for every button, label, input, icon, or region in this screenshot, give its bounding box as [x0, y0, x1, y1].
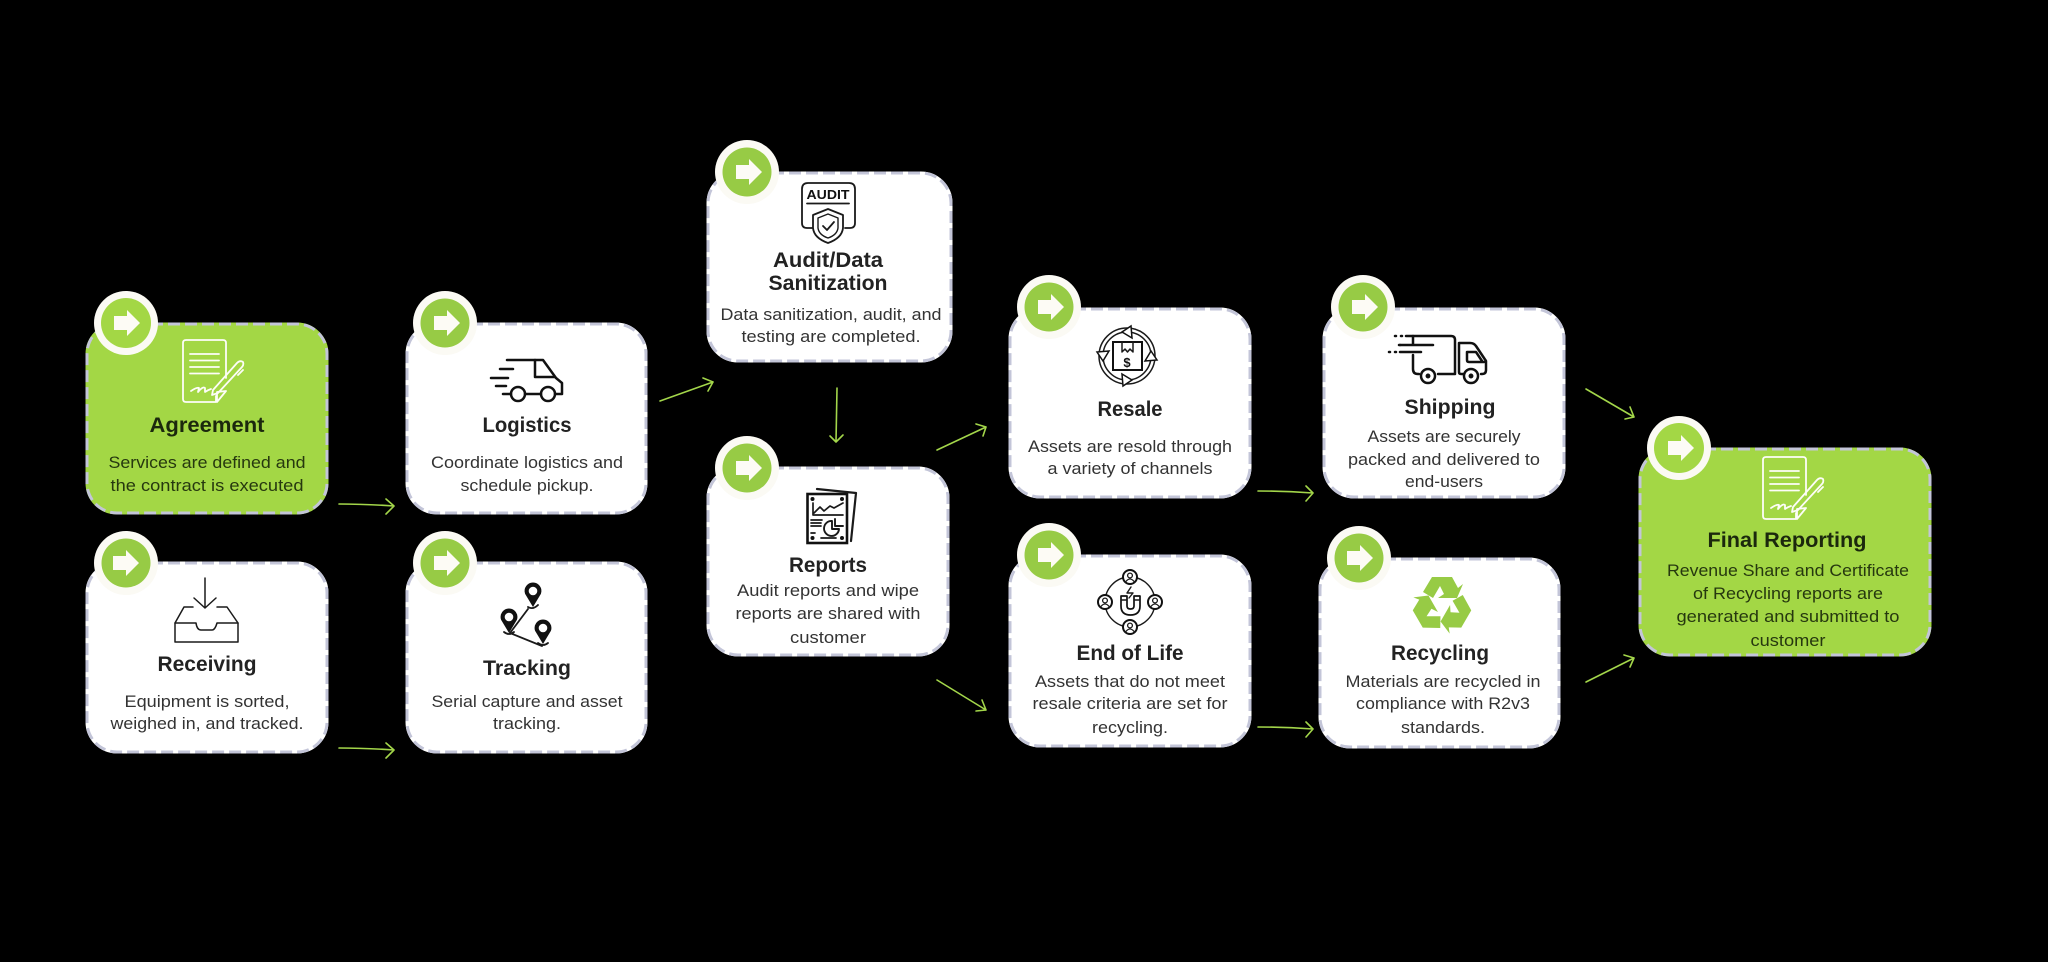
panel: Logistics [407, 291, 646, 513]
arrow: Agreement to Logistics [339, 499, 394, 514]
description: Revenue Share and Certificate [1667, 561, 1909, 580]
description: end-users [1405, 472, 1483, 491]
arrow: Resale to Shipping [1258, 486, 1313, 501]
heading: End of Life [1076, 642, 1184, 665]
heading: Recycling [1391, 642, 1489, 665]
description: reports are shared with [736, 604, 920, 623]
icon: signed document [183, 340, 243, 402]
description: packed and delivered to [1348, 450, 1540, 469]
description: recycling. [1092, 718, 1168, 737]
description: Serial capture and asset [432, 692, 623, 711]
heading: Shipping [1404, 396, 1496, 419]
description: Data sanitization, audit, and [720, 305, 942, 324]
description [720, 305, 942, 346]
badge: arrow [1331, 275, 1395, 339]
icon: audit shield: AUDIT [806, 187, 850, 202]
description [1667, 561, 1909, 650]
panel: Recycling [1320, 526, 1559, 747]
description: testing are completed. [742, 327, 920, 346]
arrow: Audit to Reports [830, 388, 843, 442]
description [109, 692, 304, 733]
heading [768, 249, 888, 295]
heading: Final Reporting [1708, 529, 1866, 552]
panel: Resale [1010, 275, 1250, 497]
description [108, 453, 306, 495]
description: of Recycling reports are [1693, 584, 1883, 603]
icon: inbox tray [175, 578, 238, 642]
description: Services are defined and [108, 453, 306, 472]
description [1346, 672, 1540, 737]
arrow: Logistics to Audit [660, 378, 713, 401]
panel: Receiving [87, 531, 327, 752]
icon: circular resale box [1097, 326, 1157, 386]
description: customer [1750, 631, 1826, 650]
badge: arrow [413, 531, 477, 595]
icon: recycling symbol [1407, 577, 1476, 637]
arrow: End of Life to Recycling [1258, 722, 1313, 737]
badge: arrow [1017, 523, 1081, 587]
badge: arrow [94, 531, 158, 595]
badge: arrow [715, 140, 779, 204]
heading: Receiving [158, 653, 256, 676]
heading: Reports [789, 554, 867, 577]
icon: audit shield [802, 183, 855, 243]
description: Assets that do not meet [1035, 672, 1225, 691]
badge: arrow [1327, 526, 1391, 590]
description: Assets are securely [1368, 427, 1521, 446]
description: standards. [1401, 718, 1485, 737]
icon: report pages [808, 489, 856, 543]
heading: Resale [1098, 398, 1162, 421]
badge: arrow [1647, 416, 1711, 480]
heading: Logistics [482, 414, 572, 437]
arrow: Recycling to Final Reporting [1586, 655, 1634, 682]
panel: Agreement [87, 291, 327, 513]
description [431, 453, 623, 495]
description: Audit reports and wipe [737, 581, 919, 600]
panel: Tracking [407, 531, 646, 752]
description: weighed in, and tracked. [109, 714, 304, 733]
icon: magnet with people [1098, 570, 1162, 634]
panel: Final Reporting [1640, 416, 1930, 655]
description [1032, 672, 1228, 737]
description: schedule pickup. [460, 476, 594, 495]
panel: Shipping [1324, 275, 1564, 497]
description: the contract is executed [110, 476, 304, 495]
arrow: Reports to End of Life [937, 680, 986, 711]
description [432, 692, 623, 733]
heading: Tracking [483, 657, 571, 680]
description: compliance with R2v3 [1356, 694, 1530, 713]
description [1348, 427, 1540, 491]
icon: moving truck [1389, 336, 1486, 383]
arrow: Receiving to Tracking [339, 743, 394, 758]
badge: arrow [413, 291, 477, 355]
arrow: Shipping to Final Reporting [1586, 389, 1634, 419]
icon: signed document [1763, 457, 1823, 519]
icon: map pins [501, 583, 551, 646]
badge: arrow [715, 436, 779, 500]
badge: arrow [1017, 275, 1081, 339]
arrow: Reports to Resale [937, 424, 986, 450]
description: generated and submitted to [1676, 607, 1900, 626]
panel: Audit/Data Sanitization [708, 140, 951, 361]
description [736, 581, 920, 647]
panel: Reports [708, 436, 948, 655]
description: a variety of channels [1048, 459, 1212, 478]
description: Coordinate logistics and [431, 453, 623, 472]
description: Materials are recycled in [1346, 672, 1540, 691]
icon: delivery van [491, 360, 562, 401]
heading: Audit/Data [773, 249, 883, 272]
description: customer [790, 628, 866, 647]
heading: Sanitization [768, 272, 888, 295]
description: resale criteria are set for [1032, 694, 1228, 713]
badge: arrow [94, 291, 158, 355]
heading: Agreement [150, 414, 264, 437]
description: Equipment is sorted, [124, 692, 290, 711]
icon: circular resale box: $ [1123, 355, 1131, 370]
description: Assets are resold through [1028, 437, 1232, 456]
panel: End of Life [1010, 523, 1250, 746]
description: tracking. [493, 714, 561, 733]
description [1028, 437, 1232, 478]
